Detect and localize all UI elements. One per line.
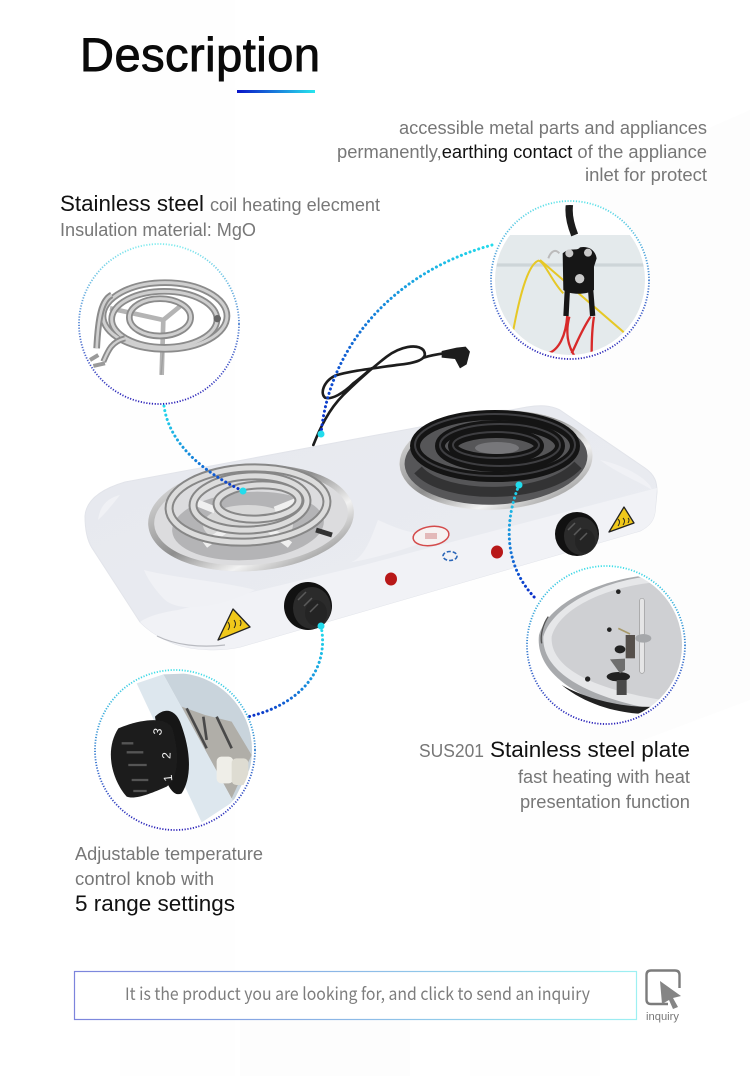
inquiry banner	[74, 972, 636, 1020]
text block: stainless steel plate: Stainless steel plate	[490, 737, 690, 762]
detail circle: control knob	[95, 670, 258, 830]
right warning triangle	[609, 507, 634, 532]
text block: earthing contact: accessible metal parts and appliances	[399, 118, 707, 138]
text block: stainless steel plate: presentation function	[520, 792, 690, 812]
left knob	[284, 582, 332, 630]
detail circle: stainless steel plate	[527, 566, 702, 724]
detail circle: control knob: 3	[150, 727, 165, 736]
title underline	[237, 90, 315, 93]
cable	[569, 202, 575, 235]
text block: stainless steel plate	[419, 737, 690, 812]
power cord and plug	[313, 347, 470, 445]
text block: stainless steel coil: Insulation material: MgO	[60, 220, 256, 240]
detail circle: control knob: 2	[159, 752, 174, 759]
connector: coil circle to left burner	[164, 406, 246, 494]
text block: stainless steel coil: Stainless steel	[60, 191, 204, 216]
detail circle: heating coil	[79, 244, 239, 404]
text block: temperature knob: control knob with	[75, 869, 214, 889]
red indicator lights	[385, 546, 503, 586]
connector: earthing circle to cord	[318, 245, 492, 438]
text block: temperature knob	[75, 844, 263, 916]
right knob	[555, 512, 599, 556]
text block: temperature knob: Adjustable temperature	[75, 844, 263, 864]
detail circle: earthing wiring	[490, 200, 650, 360]
connector: right burner to plate circle	[509, 482, 537, 600]
left silver burner	[145, 458, 357, 578]
text block: temperature knob: 5 range settings	[75, 891, 235, 916]
brand logo	[443, 552, 457, 560]
recessed panels	[98, 460, 652, 607]
text block: stainless steel plate: fast heating with heat	[518, 767, 690, 787]
inquiry banner: It is the product you are looking for, and click to send an inquiry	[125, 980, 590, 1005]
text block: earthing contact: inlet for protect	[585, 165, 707, 185]
text block: earthing contact	[337, 118, 707, 185]
cooker body	[85, 406, 657, 650]
text block: stainless steel plate: SUS201	[419, 741, 484, 761]
detail circle: control knob: 1	[161, 774, 175, 782]
text block: stainless steel coil	[60, 191, 380, 240]
text block: earthing contact: permanently,earthing contact of the appliance	[337, 142, 707, 162]
front panel	[140, 488, 657, 650]
cooker product illustration	[85, 347, 657, 650]
connector: knob to knob circle	[247, 622, 324, 717]
left warning triangle	[218, 609, 250, 640]
text block: stainless steel coil: coil heating elecment	[210, 195, 380, 215]
icon: inquiry cursor: inquiry	[646, 1011, 680, 1023]
right black burner	[397, 405, 595, 515]
title: Description	[80, 28, 320, 81]
icon: inquiry cursor	[646, 970, 681, 1023]
certification sticker	[412, 524, 450, 548]
